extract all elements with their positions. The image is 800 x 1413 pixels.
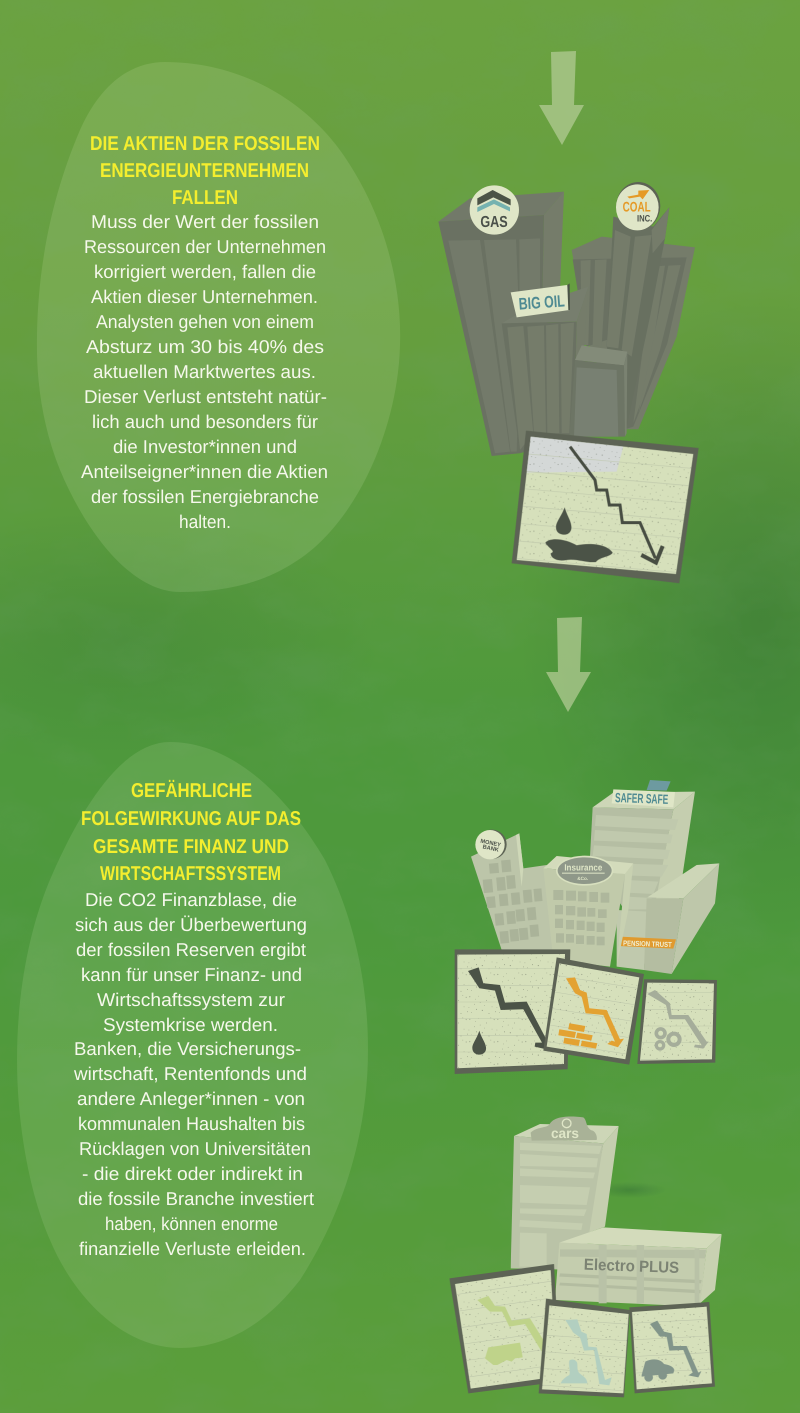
body text 1: die Investor*innen und — [113, 436, 297, 457]
arrow 1 — [539, 51, 584, 145]
chart: person — [538, 1298, 630, 1398]
building: BIG OIL tower — [502, 287, 588, 453]
heading 1: ENERGIEUNTERNEHMEN — [100, 160, 309, 182]
arrow 2 — [546, 617, 591, 712]
badge: COAL INC.: INC. — [637, 213, 652, 223]
heading 2: WIRTSCHAFTSSYSTEM — [100, 863, 281, 885]
body text 2: kommunalen Haushalten bis — [78, 1113, 305, 1134]
badge: GAS: GAS — [480, 213, 508, 231]
body text 1: Analysten gehen von einem — [96, 311, 314, 332]
badge: COAL INC. — [616, 182, 660, 230]
body text 1: Muss der Wert der fossilen — [91, 211, 319, 232]
heading 2 — [81, 779, 301, 885]
body text 1: aktuellen Marktwertes aus. — [93, 361, 316, 382]
building: Insurance: Insurance — [564, 862, 602, 872]
illustration: car and electro companies with falling charts — [450, 1116, 722, 1398]
sign: BIG OIL: BIG OIL — [518, 291, 565, 313]
body text 1: Absturz um 30 bis 40% des — [86, 336, 324, 357]
body text 2: haben, können enorme — [105, 1213, 278, 1234]
building: Safer Safe — [590, 780, 695, 913]
body text 2: - die direkt oder indirekt in — [82, 1163, 303, 1184]
panel: falling fossil energy shares — [37, 62, 400, 592]
text bubble 1 — [37, 62, 400, 592]
building: Electro PLUS — [555, 1227, 722, 1307]
building: cars — [511, 1117, 619, 1270]
body text 2: Rücklagen von Universitäten — [79, 1138, 311, 1159]
building: Insurance — [543, 856, 633, 967]
heading 2: GEFÄHRLICHE — [131, 779, 252, 802]
building: small front tower — [569, 345, 627, 437]
body text 2: die fossile Branche investiert — [78, 1188, 314, 1209]
body text 2: der fossilen Reserven ergibt — [76, 939, 306, 960]
body text 2: finanzielle Verluste erleiden. — [79, 1238, 306, 1259]
building: Insurance: &Co. — [577, 876, 588, 881]
heading 2: GESAMTE FINANZ UND — [93, 836, 289, 858]
body text 2: sich aus der Überbewertung — [75, 914, 307, 935]
body text 1 — [81, 211, 328, 532]
text bubble 2 — [17, 742, 368, 1348]
body text 2: Die CO2 Finanzblase, die — [85, 889, 297, 910]
chart: bus — [450, 1264, 556, 1394]
building: GAS tower — [438, 192, 564, 456]
heading 1: DIE AKTIEN DER FOSSILEN — [90, 133, 320, 155]
body text 2: andere Anleger*innen - von — [77, 1088, 305, 1109]
heading 1 — [90, 133, 320, 209]
panel: dangerous consequences for the financial system — [17, 742, 368, 1348]
chart: gears — [620, 979, 800, 1109]
heading 2: FOLGEWIRKUNG AUF DAS — [81, 808, 301, 830]
illustration: fossil company towers and falling chart — [438, 182, 719, 593]
building: Money Bank: BANK — [482, 843, 500, 853]
body text 2: Wirtschaftssystem zur — [97, 989, 285, 1010]
illustration: financial institutions and falling charts — [454, 780, 720, 1074]
body text 1: Aktien dieser Unternehmen. — [91, 286, 318, 307]
body text 1: Ressourcen der Unternehmen — [84, 236, 326, 257]
body text 2 — [73, 889, 314, 1259]
building: Safer Safe: SAFER SAFE — [615, 790, 669, 807]
building: Money Bank: MONEY — [480, 838, 502, 848]
body text 1: lich auch und besonders für — [92, 411, 318, 432]
building: Money Bank — [471, 830, 553, 957]
body text 2: Systemkrise werden. — [103, 1014, 278, 1035]
body text 2: Banken, die Versicherungs- — [74, 1038, 301, 1059]
chart: gold bricks — [515, 957, 751, 1121]
body text 2: kann für unser Finanz- und — [81, 964, 302, 985]
badge: GAS — [470, 185, 519, 235]
building: Pension Trust — [617, 863, 719, 974]
body text 2: wirtschaft, Rentenfonds und — [73, 1063, 307, 1084]
heading 1: FALLEN — [172, 187, 238, 209]
building: Electro PLUS: Electro PLUS — [584, 1256, 679, 1277]
body text 1: korrigiert werden, fallen die — [94, 261, 316, 282]
chart: car — [629, 1302, 716, 1394]
building: COAL tower group — [572, 207, 695, 429]
chart: oil — [437, 949, 657, 1085]
badge: COAL INC.: COAL — [623, 199, 651, 214]
building: cars: cars — [551, 1125, 579, 1141]
body text 1: Anteilseigner*innen die Aktien — [81, 461, 328, 482]
body text 1: Dieser Verlust entsteht natür- — [84, 386, 327, 407]
sign: BIG OIL — [511, 283, 570, 317]
body text 1: halten. — [179, 511, 231, 532]
chart: oil stock falling — [512, 430, 699, 584]
building: Pension Trust: PENSION TRUST — [623, 939, 672, 949]
body text 1: der fossilen Energiebranche — [91, 486, 319, 507]
